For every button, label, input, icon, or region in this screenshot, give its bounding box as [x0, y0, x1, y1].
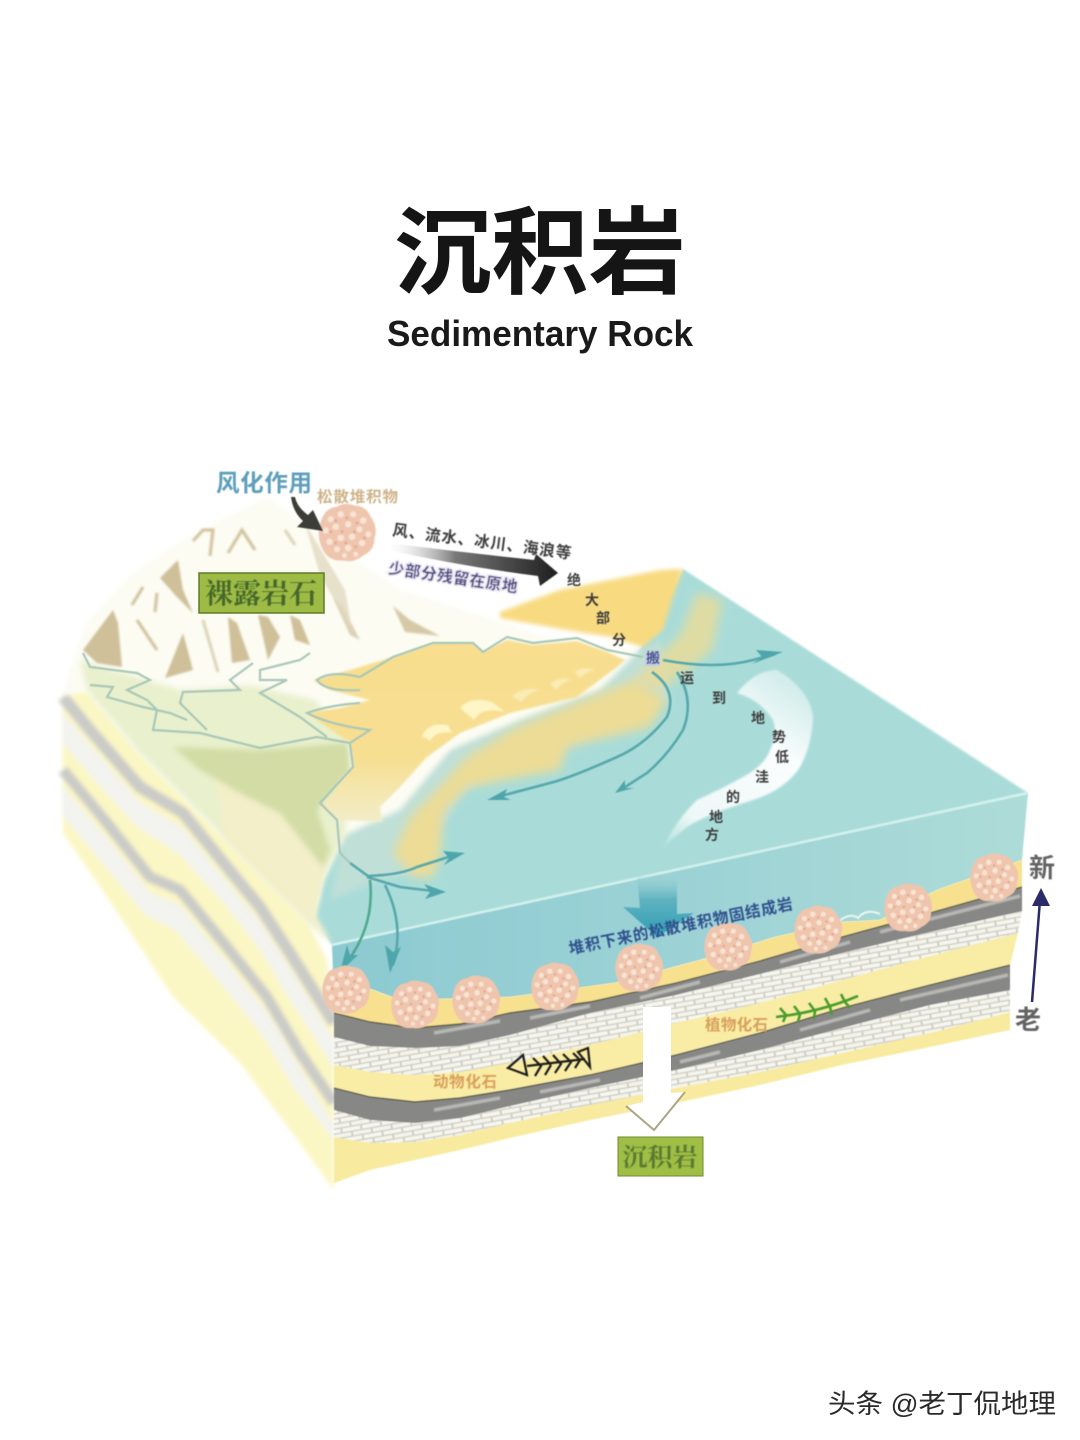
block diagram	[62, 470, 1055, 1190]
curved caption along the flow: 到	[712, 690, 726, 706]
white current swirl	[657, 670, 813, 853]
mountains	[83, 523, 440, 678]
label: plant fossil: 植物化石	[705, 1015, 768, 1034]
upper grey layer	[334, 887, 1022, 1048]
near-shore pale water	[330, 640, 670, 900]
label: weathering: 风化作用	[216, 470, 312, 496]
squiggle on the sediment surface	[838, 912, 880, 922]
teal transport arrows	[347, 654, 775, 965]
black transport arrow	[388, 543, 558, 586]
rock pebbles on the sea floor	[322, 854, 1018, 1029]
curved caption along the flow: 运	[680, 670, 694, 686]
rivers	[83, 637, 643, 863]
white edge line	[332, 793, 1028, 945]
fossil: plant	[776, 994, 858, 1022]
label: small part stays: 少部分残留在原地	[387, 558, 519, 596]
cream lowland	[215, 775, 330, 942]
curved caption along the flow: 大	[585, 592, 599, 608]
front water	[332, 793, 1028, 1000]
curved caption along the flow: 部	[596, 610, 610, 626]
curved caption along the flow: 势	[772, 729, 786, 745]
label: transport agents: 风、流水、冰川、海浪等	[391, 520, 572, 562]
curved caption along the flow: 低	[775, 749, 789, 765]
curved caption along the flow: 搬	[646, 650, 660, 666]
curved caption along the flow	[567, 572, 789, 843]
fossil: fish skeleton	[508, 1048, 590, 1076]
lower grey layer	[334, 965, 1010, 1123]
upper sand	[500, 569, 683, 647]
curved caption along the flow: 洼	[755, 769, 769, 785]
curved caption along the flow: 地	[709, 809, 723, 825]
bottom yellow layer	[334, 1012, 1010, 1183]
curved dark arrow	[291, 497, 323, 531]
label: sedimentary rock box	[618, 1137, 703, 1176]
teal down arrow	[623, 874, 694, 937]
middle yellow layer	[334, 933, 1018, 1102]
upper brick layer	[334, 911, 1022, 1075]
subtitle: Sedimentary Rock	[387, 313, 694, 354]
left face of the block	[62, 690, 334, 1190]
lower brick layer	[334, 990, 1010, 1143]
grey streaks	[434, 896, 1020, 1110]
label: bare rock box: 裸露岩石	[205, 578, 317, 610]
sea surface	[313, 569, 1028, 945]
pebble pile: loose sediment	[319, 504, 376, 561]
green plain	[80, 660, 350, 945]
label: loose sediment: 松散堆积物	[317, 488, 398, 506]
green lowland patch	[173, 743, 350, 867]
label: consolidation: 堆积下来的松散堆积物固结成岩	[567, 894, 794, 958]
curved caption along the flow: 分	[612, 632, 626, 648]
sand dunes	[422, 668, 595, 741]
curved caption along the flow: 方	[705, 827, 719, 843]
watermark: 头条 @老丁侃地理	[828, 1389, 1056, 1419]
land: mountain base	[62, 497, 640, 945]
label: animal fossil: 动物化石	[433, 1072, 497, 1091]
time axis: new to old: 新	[1029, 853, 1055, 883]
curved caption along the flow: 的	[726, 789, 740, 805]
white down arrow	[626, 1007, 685, 1130]
curved caption along the flow: 绝	[567, 572, 581, 588]
time axis: new to old	[1015, 853, 1055, 1035]
label: sedimentary rock box: 沉积岩	[622, 1144, 698, 1172]
curved caption along the flow: 地	[751, 710, 765, 726]
yellow shallows	[393, 593, 722, 877]
title: 沉积岩	[394, 201, 686, 307]
main sand plain	[307, 640, 625, 822]
label: bare rock box	[199, 573, 324, 613]
teal arrowheads	[340, 650, 783, 973]
time axis: new to old: 老	[1015, 1005, 1041, 1035]
front strata	[333, 860, 1022, 1183]
sediment layer	[333, 860, 1022, 1028]
